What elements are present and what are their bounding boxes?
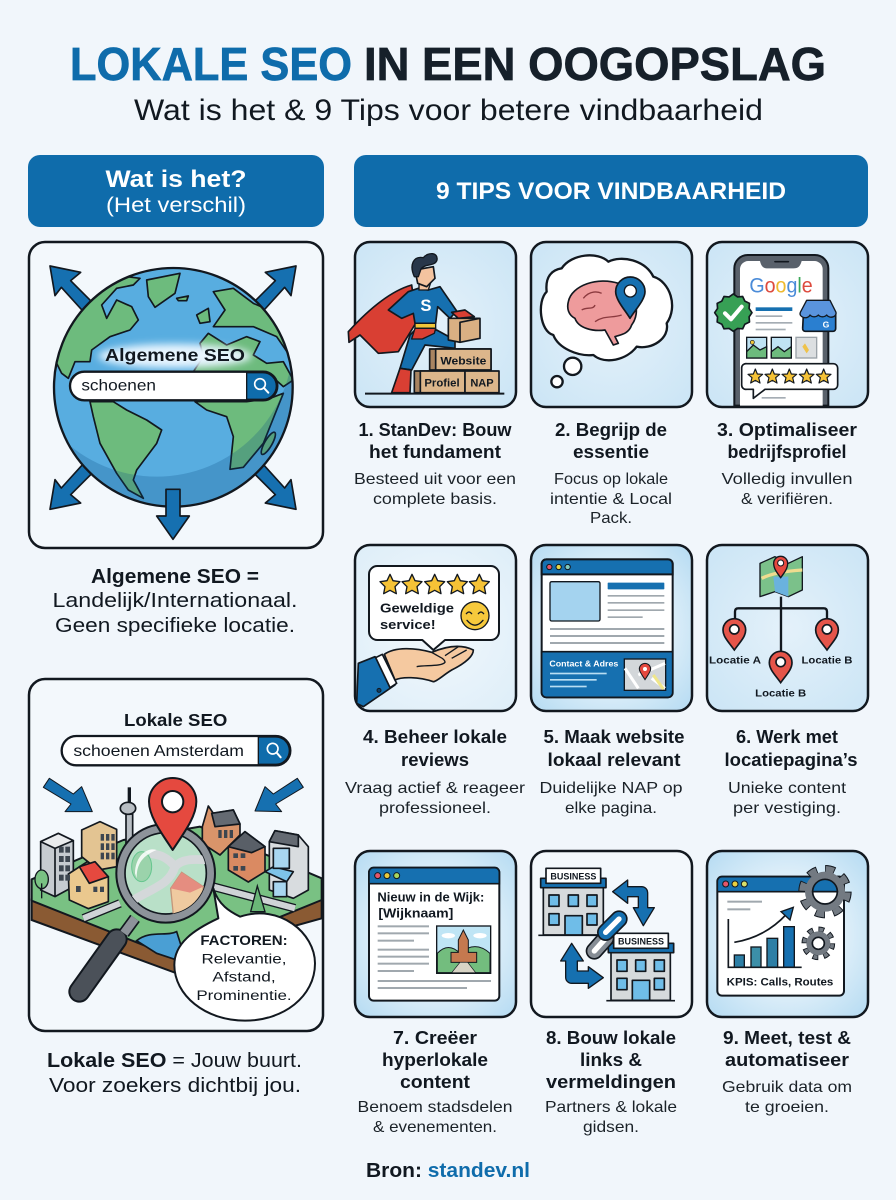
heading: wat is het: (Het verschil) — [106, 194, 246, 217]
callout: factoren: Prominentie. — [196, 988, 292, 1003]
panel: tip 3 — [707, 242, 868, 508]
panel: algemene seo globe — [28, 240, 324, 550]
illustration: neighbourhood map — [32, 787, 322, 973]
subtitle: Wat is het & 9 Tips voor betere vindbaarheid — [134, 94, 763, 127]
icon: website with contact section — [542, 559, 673, 697]
icon: phone with google profile: G — [823, 320, 830, 330]
building two — [606, 933, 675, 1001]
tip 9 description: Gebruik data om — [722, 1079, 852, 1096]
tip 5 description: elke pagina. — [565, 800, 657, 817]
panel: tip 8 — [531, 851, 692, 1136]
tip 3 description — [722, 471, 852, 508]
text: algemene seo caption: Geen specifieke locatie. — [55, 615, 295, 637]
title: IN EEN OOGOPSLAG — [364, 38, 826, 90]
icon: magnifying glass — [79, 824, 215, 992]
search bar: schoenen amsterdam — [62, 736, 290, 765]
icon: location tree: Locatie B — [801, 655, 852, 666]
icon: local news page: [Wijknaam] — [378, 905, 453, 920]
icon: superhero with boxes — [348, 254, 504, 394]
icon: down arrow — [157, 489, 189, 539]
tip 2 description — [550, 471, 672, 527]
icon: superhero with boxes: Website — [440, 355, 486, 367]
callout: factoren — [174, 888, 315, 1021]
panel: tip 2 — [531, 242, 692, 527]
text: lokale seo caption — [47, 1049, 302, 1097]
title — [70, 38, 826, 90]
tip 3 title: 3. Optimaliseer — [717, 419, 857, 440]
tip 8 description — [545, 1099, 677, 1136]
icon: location pin — [149, 778, 196, 850]
tip 7 description — [358, 1099, 512, 1136]
tip 3 title: bedrijfsprofiel — [728, 441, 846, 462]
building one — [538, 868, 608, 935]
panel: lokale seo — [29, 679, 323, 1031]
search bar: schoenen: schoenen — [81, 378, 156, 395]
icon: thought cloud with brain — [541, 255, 672, 387]
tip 4 title — [363, 726, 507, 770]
icon: location tree — [709, 556, 852, 699]
tip 4 description: Vraag actief & reageer — [345, 780, 526, 797]
tip 1 title: het fundament — [369, 441, 501, 462]
trees — [35, 870, 265, 912]
source footer: Bron: standev.nl — [366, 1160, 530, 1182]
large gear — [802, 869, 848, 914]
text: algemene seo caption: Algemene SEO = — [91, 566, 259, 588]
icon: dashboard with gears: KPIS: Calls, Routes — [727, 977, 833, 989]
icon: local news page: Nieuw in de Wijk: — [377, 890, 484, 905]
icon: review bubble with hand: service! — [380, 617, 436, 632]
tip 3 title — [717, 419, 857, 462]
tip 7 description: & evenementen. — [373, 1119, 497, 1136]
icon: phone with google profile — [715, 255, 838, 406]
tip 7 title — [382, 1027, 488, 1092]
icon: local news page — [369, 868, 499, 1001]
tip 4 title: reviews — [401, 749, 469, 770]
tip 5 description: Duidelijke NAP op — [540, 780, 683, 797]
tip 2 description: intentie & Local — [550, 491, 672, 508]
panel: tip 5 — [531, 545, 692, 817]
tip 4 title: 4. Beheer lokale — [363, 726, 507, 747]
tip 9 title: automatiseer — [725, 1049, 849, 1070]
callout: factoren: Relevantie, — [201, 951, 286, 966]
icon: globe — [52, 266, 294, 508]
heading: wat is het — [28, 155, 324, 227]
heading: lokale seo: Lokale SEO — [124, 710, 227, 730]
tip 6 title: locatiepagina’s — [724, 749, 858, 770]
tip 5 title — [544, 726, 684, 770]
tip 6 description: per vestiging. — [733, 800, 841, 817]
icon: linked businesses — [538, 868, 675, 1001]
text: lokale seo caption: Lokale SEO = Jouw buurt. — [47, 1049, 302, 1072]
icon: review bubble with hand — [357, 566, 499, 707]
text: algemene seo caption — [52, 566, 298, 637]
tip 9 description: te groeien. — [745, 1099, 829, 1116]
tip 7 description: Benoem stadsdelen — [358, 1099, 512, 1116]
tip 8 title: 8. Bouw lokale — [546, 1027, 676, 1048]
icon: superhero with boxes: S — [420, 296, 432, 315]
tip 5 description — [540, 780, 683, 817]
icon: diagonal arrows — [50, 266, 296, 509]
tip 7 title: 7. Creëer — [393, 1027, 477, 1048]
tip 8 title — [546, 1027, 676, 1092]
tip 9 title — [723, 1027, 851, 1070]
icon: location tree: Locatie B — [755, 688, 806, 699]
tip 8 description: gidsen. — [583, 1119, 639, 1136]
icon: website with contact section: Contact & Adres — [549, 659, 619, 669]
tip 5 title: lokaal relevant — [548, 749, 680, 770]
tip 6 description: Unieke content — [728, 780, 847, 797]
panel: tip 9 — [707, 851, 868, 1116]
tip 3 description: & verifiëren. — [741, 491, 833, 508]
panel: tip 7 — [355, 851, 516, 1136]
tip 6 description — [728, 780, 847, 817]
heading: 9 tips — [354, 155, 868, 227]
tip 5 title: 5. Maak website — [544, 726, 684, 747]
icon: linked businesses: BUSINESS — [618, 937, 664, 947]
icon: linked businesses: BUSINESS — [550, 872, 596, 882]
tip 1 description: complete basis. — [373, 491, 497, 508]
search bar: schoenen — [70, 372, 277, 400]
tip 9 description — [722, 1079, 852, 1116]
icon: location tree: Locatie A — [709, 655, 762, 666]
tip 6 title: 6. Werk met — [736, 726, 838, 747]
text: lokale seo caption: Voor zoekers dichtbij jou. — [49, 1074, 301, 1097]
tip 8 title: links & — [580, 1049, 642, 1070]
tip 4 description — [345, 780, 526, 817]
tip 1 title: 1. StanDev: Bouw — [358, 419, 512, 440]
buildings — [41, 787, 308, 909]
tip 2 title: 2. Begrijp de — [555, 419, 667, 440]
label: algemene seo: Algemene SEO — [105, 345, 245, 365]
icon: arrows inward — [43, 778, 303, 812]
tip 8 title: vermeldingen — [546, 1071, 676, 1092]
callout: factoren: Afstand, — [212, 970, 276, 985]
tip 1 description: Besteed uit voor een — [354, 471, 516, 488]
heading: wat is het: Wat is het? — [106, 166, 246, 193]
icon: dashboard with gears — [717, 869, 848, 996]
icon: phone with google profile: Google — [749, 274, 813, 297]
panel: tip 1 — [348, 242, 516, 508]
small gear — [804, 929, 832, 957]
tip 4 description: professioneel. — [379, 800, 491, 817]
tip 1 description — [354, 471, 516, 508]
tip 7 title: hyperlokale — [382, 1049, 488, 1070]
callout: factoren: FACTOREN: — [200, 933, 288, 948]
tip 3 description: Volledig invullen — [722, 471, 852, 488]
tip 9 title: 9. Meet, test & — [723, 1027, 851, 1048]
panel: tip 6 — [707, 545, 868, 817]
icon: superhero with boxes: NAP — [470, 378, 494, 390]
search bar: schoenen amsterdam: schoenen Amsterdam — [73, 743, 244, 760]
tip 2 title: essentie — [573, 441, 649, 462]
icon: review bubble with hand: Geweldige — [380, 600, 454, 615]
panel: tip 4 — [345, 545, 526, 817]
tip 2 description: Pack. — [590, 510, 632, 527]
text: algemene seo caption: Landelijk/Internationaal. — [52, 590, 298, 612]
tip 2 title — [555, 419, 667, 462]
tip 7 title: content — [400, 1071, 470, 1092]
chain link — [594, 919, 619, 951]
heading: 9 tips: 9 TIPS VOOR VINDBAARHEID — [436, 178, 786, 205]
icon: superhero with boxes: Profiel — [424, 378, 460, 390]
exchange arrows — [561, 880, 654, 988]
tip 2 description: Focus op lokale — [554, 471, 668, 488]
tip 8 description: Partners & lokale — [545, 1099, 677, 1116]
tip 1 title — [358, 419, 512, 462]
title: LOKALE SEO — [70, 38, 352, 90]
tip 6 title — [724, 726, 858, 770]
